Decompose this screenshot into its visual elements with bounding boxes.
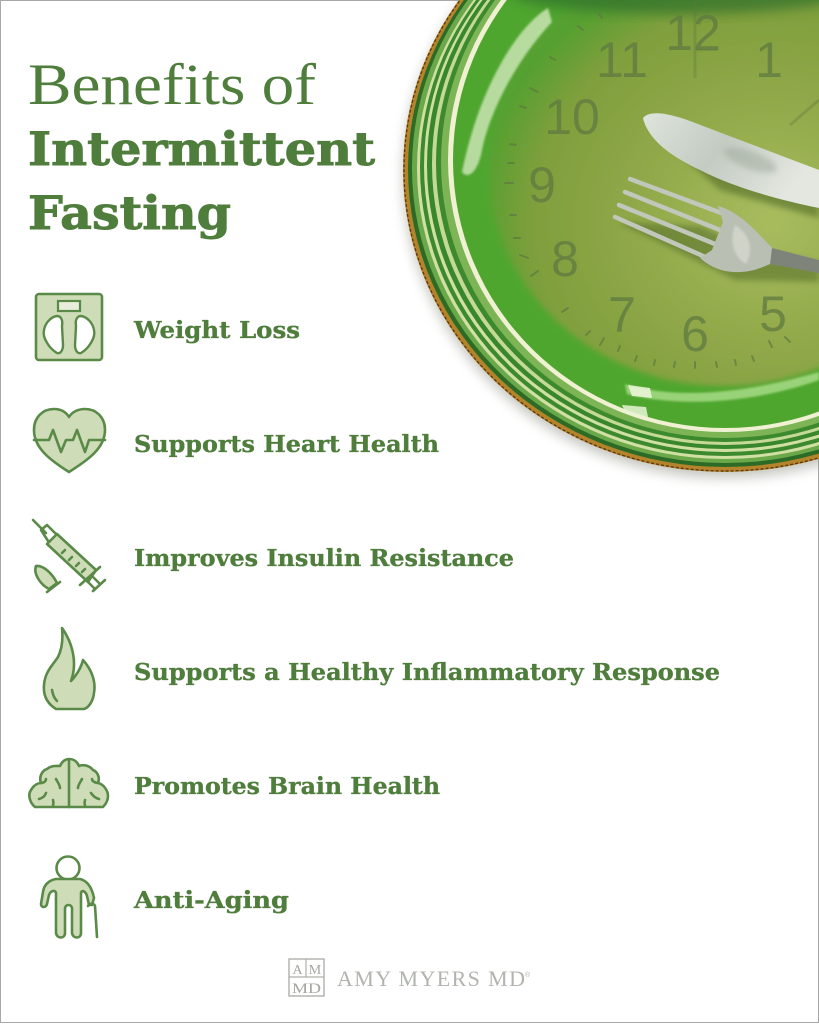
footer logo [289,959,531,997]
icon: bathroom scale [36,294,102,360]
icon: syringe [33,520,105,592]
clock numerals [528,0,819,362]
plate rim [403,0,819,472]
title: third line: Fasting [28,186,231,240]
label: anti-aging: Anti-Aging [133,887,289,914]
logo mark: MD [292,981,321,997]
clock numerals: 11 [596,32,648,88]
label: weight loss: Weight Loss [133,317,300,344]
fork tines [615,179,724,260]
clock numerals: 1 [755,32,783,88]
title: first line: Benefits of [28,52,317,117]
label: supports a healthy inflammatory response: Supports a Healthy Inflammatory Response [134,659,720,686]
glossy highlights [462,8,819,417]
clock numerals: 9 [528,157,556,213]
logo mark [289,959,324,997]
clock numerals: 12 [665,5,721,61]
clock numerals: 7 [608,287,636,343]
label: promotes brain health: Promotes Brain Health [134,773,440,800]
knife [643,113,819,218]
plate well [489,0,819,386]
plate shadow [403,0,819,478]
clock ticks [505,14,790,368]
icon: elderly person with cane [41,856,97,938]
label: improves insulin resistance: Improves Insulin Resistance [134,545,514,572]
fork head and handle [700,206,819,273]
icon: flame [44,628,95,709]
icon: heart with pulse [34,409,105,472]
clock numerals: 8 [551,231,579,287]
logo mark: M [309,963,322,978]
logo wordmark: AMY MYERS MD [337,966,525,991]
top shading [510,0,819,14]
clock numerals: 10 [544,89,600,145]
plate with clock face and cutlery [403,0,819,478]
clock numerals: 5 [759,286,787,342]
icon: brain [29,759,108,807]
title: second line: Intermittent [28,122,376,176]
logo mark: A [292,963,303,978]
label: supports heart health: Supports Heart Health [134,431,439,458]
title [28,52,376,240]
registered mark: ® [525,971,531,979]
fork [615,179,819,282]
clock numerals: 6 [681,306,709,362]
